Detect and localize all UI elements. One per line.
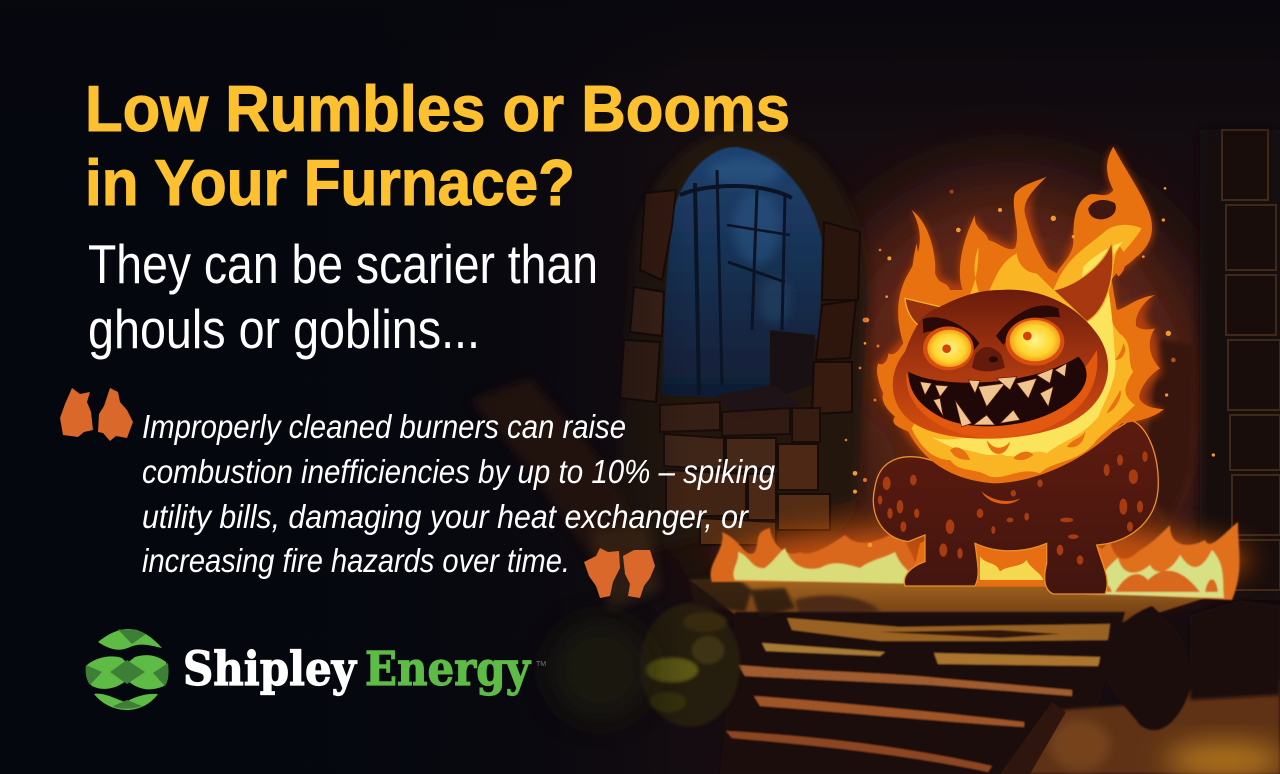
logo wordmark: Shipley — [183, 642, 358, 697]
logo wordmark — [183, 642, 546, 697]
stone frame around window — [620, 190, 860, 414]
monster flames inner — [912, 225, 1142, 477]
extra embers around window side — [845, 249, 881, 482]
stone stairs — [720, 612, 1125, 774]
title: Low Rumbles or Booms — [85, 72, 790, 145]
closing quotation mark — [584, 548, 655, 598]
logo: Shipley Energy globe mark — [86, 629, 169, 710]
horns — [905, 242, 1113, 330]
teeth — [920, 363, 1067, 427]
subtitle: They can be scarier than — [88, 233, 598, 295]
foliage at lower left of stairs — [640, 572, 795, 727]
logo wordmark: Energy — [365, 642, 531, 697]
title: in Your Furnace? — [85, 146, 575, 219]
dark gap in right flame — [1088, 200, 1116, 219]
brows — [923, 305, 1060, 350]
eyes — [923, 318, 1064, 370]
monster head — [893, 290, 1108, 439]
title — [85, 72, 790, 219]
monster flames outer — [877, 147, 1164, 483]
monster flame glow — [877, 147, 1165, 483]
bright glow between legs — [910, 534, 1107, 587]
monster flames hot core — [930, 242, 1123, 456]
floor flames — [711, 522, 1240, 600]
body and arm spots — [878, 451, 1148, 565]
arched window with blue night light — [612, 126, 868, 560]
quote text: utility bills, damaging your heat exchanger, or — [142, 498, 750, 535]
monster body — [873, 420, 1158, 594]
rock and orange debris at lower right — [1000, 600, 1280, 774]
subtitle: ghouls or goblins... — [88, 298, 480, 360]
nose — [972, 347, 1005, 371]
quote text — [142, 408, 776, 579]
quote text: Improperly cleaned burners can raise — [142, 408, 626, 445]
logo wordmark: TM — [536, 661, 546, 668]
opening quotation mark — [60, 388, 133, 441]
brick wall under window — [660, 402, 830, 545]
embers — [853, 187, 1215, 547]
orange licks in flames — [912, 243, 1125, 460]
quote text: combustion inefficiencies by up to 10% – spiking — [142, 453, 776, 490]
subtitle — [88, 233, 598, 360]
floor and flames glow — [690, 524, 1250, 622]
quote text: increasing fire hazards over time. — [142, 542, 570, 579]
flame monster character — [853, 147, 1215, 594]
mouth — [908, 357, 1087, 426]
lava rim on head — [906, 350, 1097, 438]
